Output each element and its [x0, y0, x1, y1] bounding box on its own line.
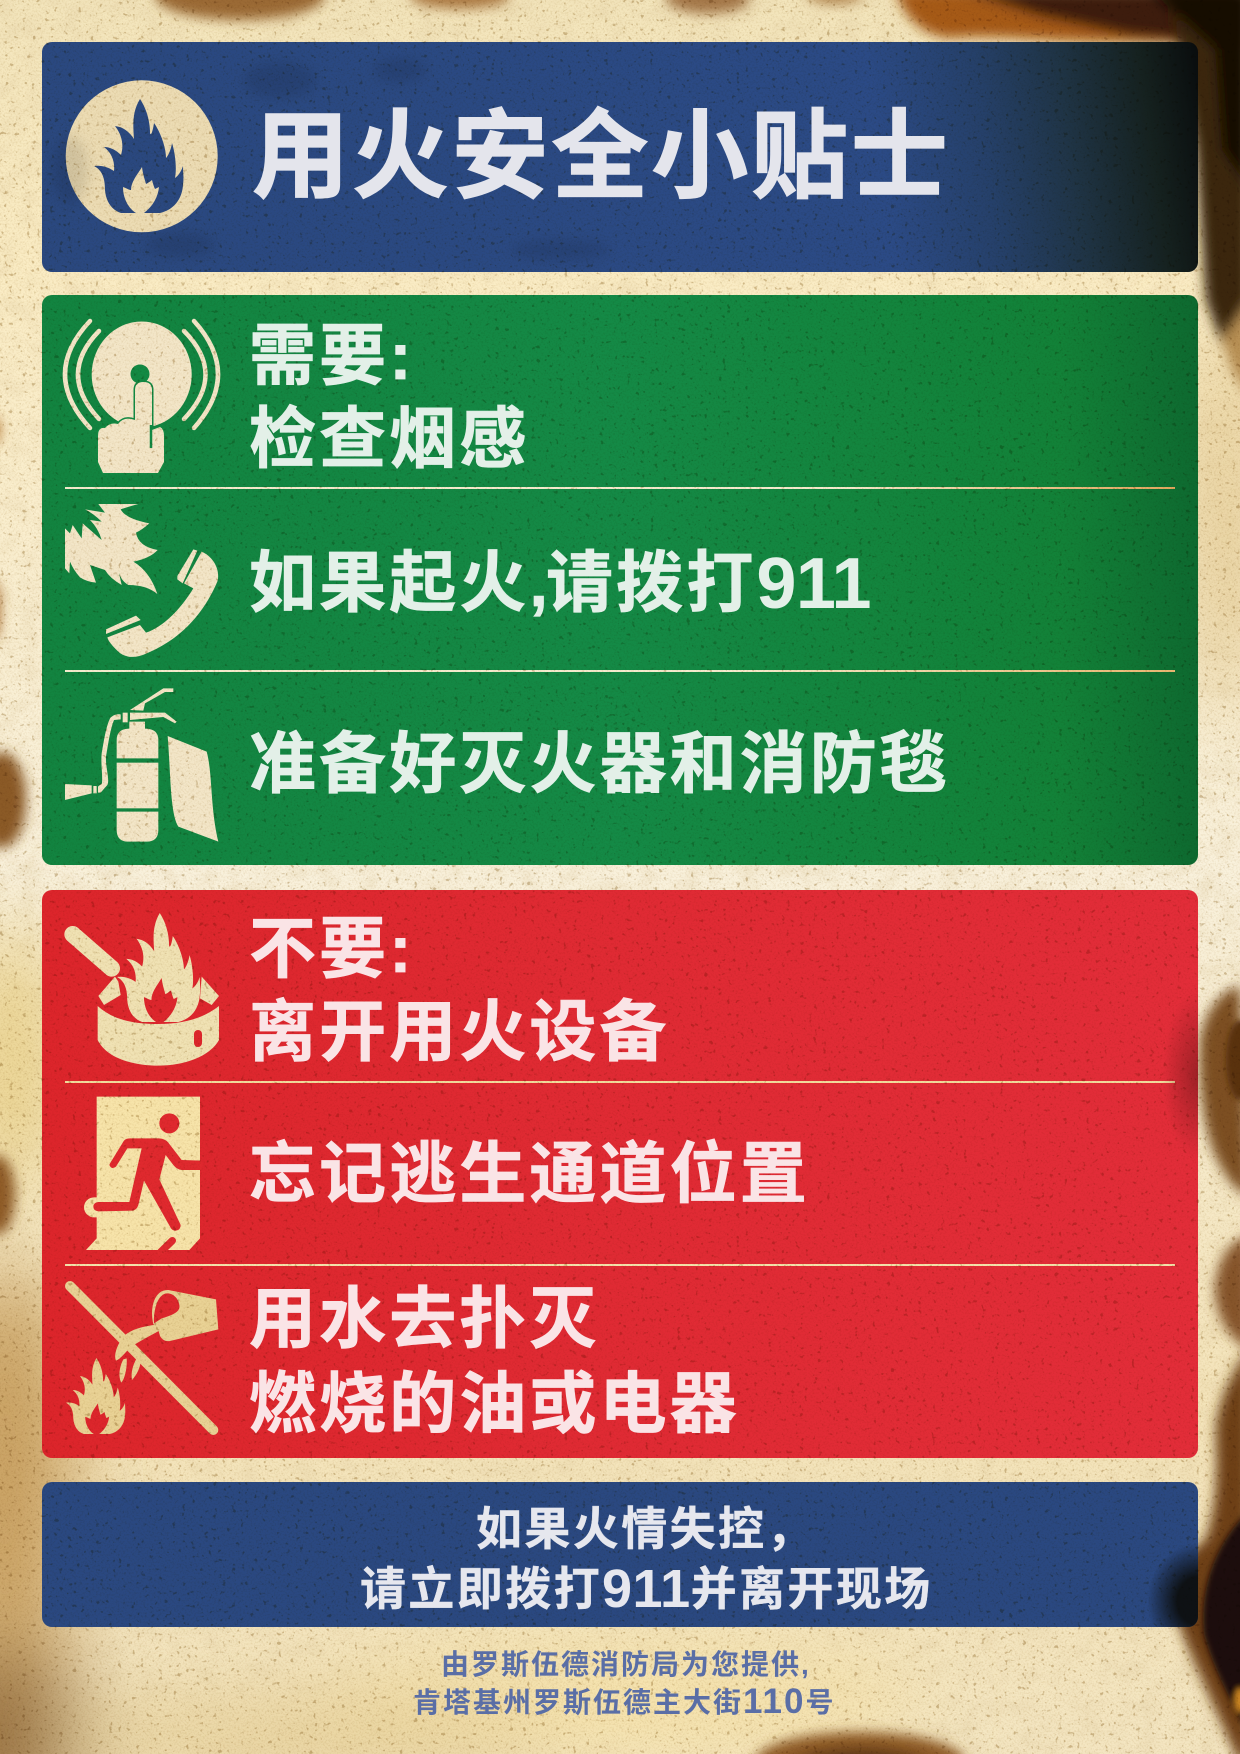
row: extinguisher and fire blanket	[65, 688, 950, 842]
credit text: 由罗斯伍德消防局为您提供,	[441, 1649, 811, 1680]
text: extinguisher and blanket: 准备好灭火器和消防毯	[249, 726, 950, 802]
heading and text: don't leave equipment: 离开用火设备	[249, 995, 670, 1070]
icon: emergency exit runner	[84, 1096, 200, 1250]
burn marks: right edge	[1150, 0, 1240, 1754]
row: don't use water on oil or electrical fires	[65, 1281, 740, 1442]
burn marks: left edge	[0, 416, 26, 1235]
title: 用火安全小贴士	[252, 102, 951, 211]
heading and text: don't leave equipment: 不要:	[249, 912, 415, 986]
panel: footer call to action	[42, 1482, 1198, 1627]
text: call to action: 如果火情失控，	[476, 1503, 815, 1555]
panel: don't (red)	[42, 890, 1198, 1458]
icon: flame in circle	[66, 80, 218, 232]
row: don't leave cooking equipment	[64, 912, 670, 1070]
heading and text: check smoke alarm	[249, 318, 529, 477]
icon: fire and telephone	[65, 504, 218, 657]
credit text	[413, 1649, 836, 1721]
text: call to action: 请立即拨打911并离开现场	[360, 1559, 933, 1619]
panel: title banner	[42, 42, 1198, 272]
icon: smoke alarm and hand	[62, 318, 220, 473]
text: water on oil or electrical fires: 燃烧的油或电器	[249, 1366, 740, 1442]
heading and text: check smoke alarm: 检查烟感	[249, 402, 529, 477]
text: water on oil or electrical fires	[249, 1282, 740, 1442]
icon: water on fire crossed out	[65, 1281, 218, 1435]
text: water on oil or electrical fires: 用水去扑灭	[249, 1282, 600, 1356]
text: call 911: 如果起火,请拨打911	[249, 544, 871, 624]
panel: do (green)	[42, 295, 1198, 865]
icon: pan on fire	[64, 913, 219, 1066]
credit text: 肯塔基州罗斯伍德主大街110号	[413, 1682, 836, 1721]
burn marks: bottom edge	[755, 1732, 965, 1754]
row: don't forget escape route	[84, 1096, 810, 1250]
text: forget escape route: 忘记逃生通道位置	[249, 1137, 810, 1212]
heading and text: don't leave equipment	[249, 912, 670, 1070]
row: check smoke alarm	[62, 318, 529, 477]
heading and text: check smoke alarm: 需要:	[249, 318, 415, 394]
burn marks: top edge	[155, 0, 1240, 46]
row: call 911	[65, 504, 871, 657]
icon: fire extinguisher and blanket	[65, 688, 218, 842]
text: call to action	[360, 1503, 933, 1619]
